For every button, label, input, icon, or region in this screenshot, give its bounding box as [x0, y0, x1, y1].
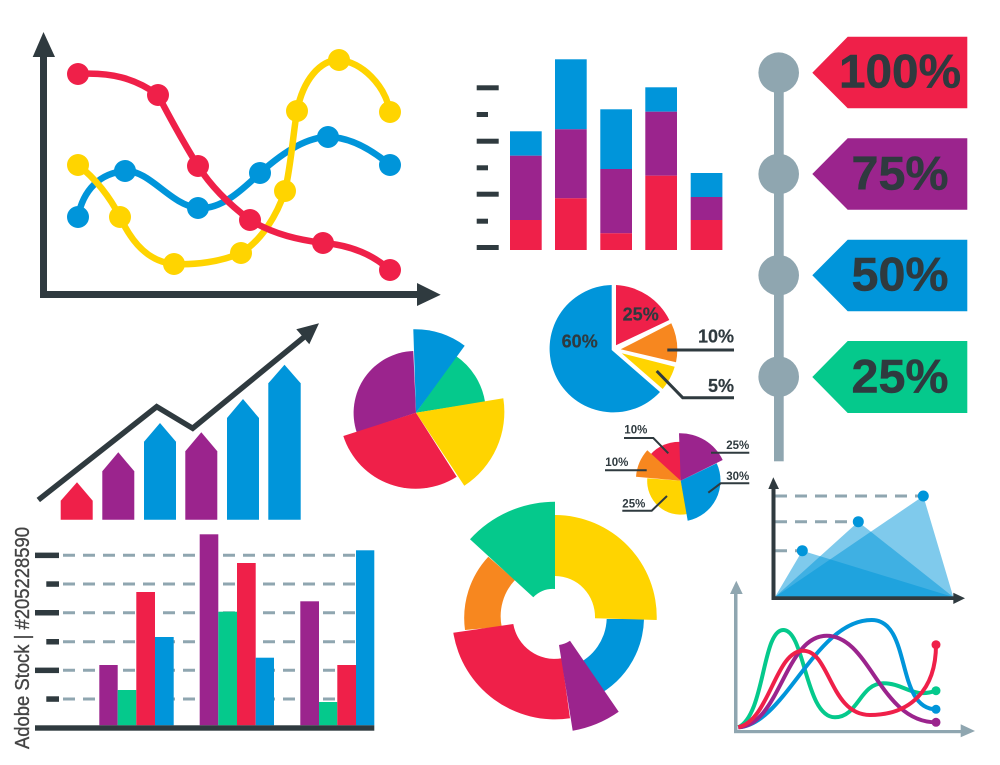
axes — [730, 581, 975, 737]
line chart with dots — [33, 32, 441, 306]
small exploded pie with leaders: 10% — [605, 457, 628, 469]
stack 3 — [600, 109, 632, 250]
axes — [33, 32, 441, 306]
tag 50% — [812, 240, 967, 311]
tag 50%: 50% — [852, 248, 948, 301]
yellow series — [67, 49, 401, 275]
grouped bar chart — [35, 534, 374, 731]
small exploded pie with leaders — [605, 425, 749, 521]
tag 25%: 25% — [852, 349, 948, 402]
data points — [797, 490, 929, 556]
smooth multi-line chart — [730, 581, 975, 737]
small exploded pie with leaders: 10% — [624, 425, 647, 437]
rising arrow bar chart — [38, 323, 319, 520]
stack 4 — [645, 87, 677, 250]
tag 75% — [812, 138, 967, 210]
exploded pie chart — [343, 329, 504, 489]
stack 2 — [555, 59, 587, 250]
area chart — [768, 477, 965, 604]
labelled pie chart — [550, 285, 734, 412]
labelled pie chart: 25% — [623, 305, 659, 325]
green curve — [738, 630, 940, 727]
baseline — [35, 725, 374, 731]
labelled pie chart: 10% — [698, 327, 734, 347]
donut chart — [453, 502, 657, 731]
group 1 — [99, 592, 174, 725]
scale ticks — [35, 553, 59, 702]
tag 100%: 100% — [839, 45, 961, 98]
small exploded pie with leaders: 25% — [622, 498, 645, 510]
labelled pie chart: 5% — [708, 376, 734, 396]
stack 1 — [510, 131, 542, 250]
dashed guides — [775, 496, 918, 551]
red curve — [738, 640, 940, 727]
axes — [768, 477, 965, 604]
stock id caption: Adobe Stock | #205228590 — [12, 527, 34, 749]
scale ticks — [477, 85, 499, 250]
group 3 — [300, 550, 374, 725]
stacked bar chart — [477, 59, 722, 250]
group 2 — [200, 534, 274, 725]
small exploded pie with leaders: 30% — [726, 471, 749, 483]
blue series — [67, 126, 401, 228]
trend arrow — [38, 323, 319, 500]
layered areas — [775, 496, 953, 597]
timeline stem — [774, 70, 784, 461]
red series — [67, 63, 401, 281]
percentage timeline — [758, 37, 967, 461]
stack 5 — [691, 173, 722, 250]
tag 25% — [812, 341, 967, 413]
timeline nodes — [758, 52, 799, 397]
tag 100% — [812, 37, 967, 108]
tag 75%: 75% — [852, 146, 948, 199]
purple curve — [738, 636, 940, 727]
small exploded pie with leaders: 25% — [726, 440, 749, 452]
labelled pie chart: 60% — [562, 331, 598, 351]
dashed gridlines — [63, 555, 356, 699]
blue curve — [738, 620, 940, 727]
